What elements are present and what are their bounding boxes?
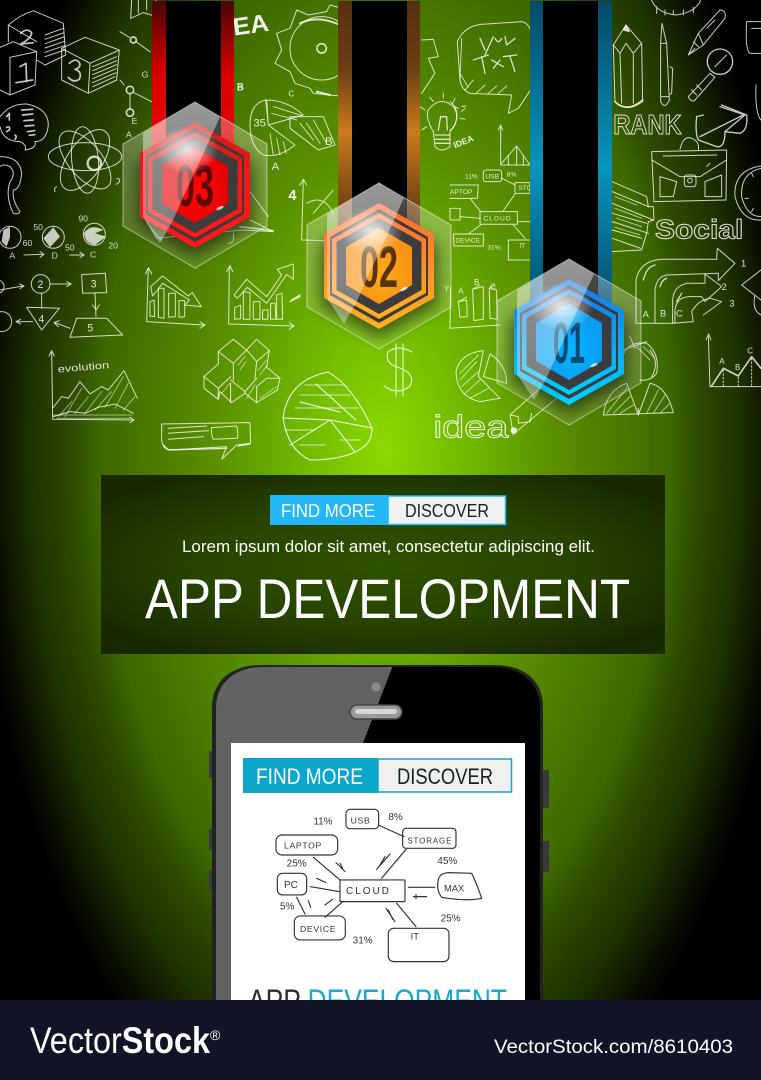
screen button: find more xyxy=(243,758,378,793)
doodle: pie chart 35: B xyxy=(325,136,333,148)
doodle: cloud diagram small: APTOP xyxy=(450,189,473,196)
sketch: labels: 8% xyxy=(388,812,403,823)
camera xyxy=(372,682,380,692)
doodle: evolution area chart xyxy=(49,351,137,423)
doodle: node network: E xyxy=(132,116,138,126)
doodle: pie chart 35: A xyxy=(272,161,280,173)
badge: 02 xyxy=(307,183,451,349)
doodle: small chart near 4: 4 xyxy=(288,188,297,204)
doodle: envelope fan xyxy=(283,372,372,460)
doodle: labels of donut charts: C xyxy=(90,249,96,259)
doodle: IDEA lettering: EA xyxy=(231,10,271,42)
phone reflection xyxy=(210,660,395,1000)
doodle: pie chart 35: C xyxy=(288,90,294,99)
doodle: pie chart 35 xyxy=(237,82,335,173)
doodle: three arrows: A xyxy=(643,309,650,319)
doodle: ABC bar chart: A xyxy=(458,286,464,295)
sketch: boxes xyxy=(276,809,482,962)
glass hexagon xyxy=(307,183,451,349)
badge: 03 xyxy=(123,102,267,268)
number: 02 xyxy=(360,235,398,300)
badge shadow xyxy=(321,216,437,338)
doodle: three arrows: C xyxy=(676,309,683,319)
hexagon rings xyxy=(514,279,624,405)
doodle: top right cards xyxy=(652,0,761,120)
doodle: cloud diagram small: 11% xyxy=(465,173,478,180)
doodle: pie chart 35: 35 xyxy=(253,118,266,130)
doodle: node network: B xyxy=(237,83,243,93)
doodle: labels of donut charts: A xyxy=(9,250,15,260)
sketch: labels: 25% xyxy=(287,859,307,870)
panel: headline banner xyxy=(101,475,665,654)
button: find more: FIND MORE xyxy=(281,500,375,521)
sketch: arrows xyxy=(308,854,427,922)
doodle: hatched pie xyxy=(456,351,507,402)
doodles: left column xyxy=(0,0,300,459)
doodle: node network: G xyxy=(142,69,149,79)
doodle: cloud diagram small: IT xyxy=(519,242,525,249)
doodle: speech bubble with list xyxy=(0,104,48,150)
spot highlight xyxy=(155,126,219,174)
doodle: cloud diagram small: 8% xyxy=(507,172,516,179)
doodle: top corner chart xyxy=(131,0,157,18)
doodle: cloud diagram small: 31% xyxy=(487,244,501,251)
doodle: pencil xyxy=(613,25,643,107)
phone face xyxy=(216,667,540,1000)
doodle: stack of books xyxy=(612,182,654,252)
glint xyxy=(400,286,408,292)
doodle: three arrows: B xyxy=(660,309,666,319)
sketch: labels: LAPTOP xyxy=(284,841,322,851)
sketch: labels: 11% xyxy=(313,817,333,828)
badge shadow xyxy=(137,135,253,257)
hexagon rings xyxy=(140,122,250,248)
doodle: three arrows: 3 xyxy=(729,299,735,309)
doodle: falling bar chart xyxy=(146,268,205,328)
sketch: labels: DEVICE xyxy=(300,924,336,934)
footer logo: VectorStock xyxy=(30,1020,210,1061)
doodles: centre column xyxy=(147,5,500,328)
doodle: node network: A xyxy=(126,129,132,139)
speaker xyxy=(350,705,402,719)
footer url: VectorStock.com/8610403 xyxy=(494,1037,733,1058)
doodle: dollar sign xyxy=(384,344,412,396)
title: APP DEVELOPMENT xyxy=(145,567,630,630)
sketch: labels: 31% xyxy=(353,935,373,946)
doodle: cloud diagram small: CLOUD xyxy=(483,216,512,223)
ribbon: 02 xyxy=(338,1,420,227)
ribbon: 01 xyxy=(530,1,612,303)
doodle: cloud diagram small: STO xyxy=(518,185,532,192)
doodle: cloud diagram small: DEVICE xyxy=(455,237,481,244)
subtitle: Lorem ipsum dolor sit amet, consectetur adipiscing elit. xyxy=(182,537,595,556)
doodle: bubble lamp side arc xyxy=(450,102,466,130)
screen button: find more: FIND MORE xyxy=(256,764,363,789)
doodle: briefcase xyxy=(652,138,727,202)
doodle: flow diagram: 5 xyxy=(87,323,93,335)
doodle: light bulb xyxy=(420,93,476,150)
doodle: ABC line chart xyxy=(706,334,761,387)
glint xyxy=(216,205,224,211)
sketch: links xyxy=(297,825,435,927)
sketch: labels: PC xyxy=(284,880,298,891)
button: find more xyxy=(270,495,388,525)
footer bar xyxy=(0,1000,761,1080)
doodle: flow diagram: 4 xyxy=(38,314,44,326)
doodle: Social lettering: Social xyxy=(655,215,743,245)
doodle: ABC bar chart: C xyxy=(490,282,496,291)
screen title: APP DEVELOPMENT xyxy=(248,983,507,1019)
doodle: pie chart 35: B xyxy=(237,82,244,94)
hand-drawn doodles xyxy=(0,0,761,460)
doodle: diagonal pencil xyxy=(688,10,725,55)
doodle: idea lettering with pencil: idea xyxy=(433,408,509,444)
sketch: labels: 25% xyxy=(441,913,461,924)
doodle: labels of donut charts: D xyxy=(52,250,58,260)
doodle: labels of donut charts: 60 xyxy=(23,238,32,248)
doodle: gear xyxy=(275,5,438,97)
doodle: ABC bar chart: Y xyxy=(444,285,450,294)
phone side buttons xyxy=(209,751,549,891)
sketch: labels: 45% xyxy=(437,856,457,867)
doodle: evolution area chart: evolution xyxy=(57,360,110,376)
doodle: RANK lettering: RANK xyxy=(613,109,682,140)
doodle: isometric cubes xyxy=(204,339,280,403)
gloss highlight xyxy=(327,183,404,324)
doodle: light bulb: IDEA xyxy=(452,133,476,150)
doodle: cloud diagram small xyxy=(450,170,532,260)
badge: 01 xyxy=(497,259,641,425)
doodle: ABC line chart: B xyxy=(735,363,740,372)
doodle: three arrows: 1 xyxy=(741,259,746,269)
doodle: labels of donut charts: 50 xyxy=(65,243,75,253)
sketch: labels: CLOUD xyxy=(346,886,391,897)
doodle: labels of donut charts: 90 xyxy=(78,214,88,224)
hexagon rings xyxy=(324,203,434,329)
spot highlight xyxy=(339,207,403,255)
gloss highlight xyxy=(517,259,594,400)
glass hexagon xyxy=(497,259,641,425)
doodle: empty speech box xyxy=(162,423,251,459)
phone xyxy=(209,660,549,1019)
doodle: node network xyxy=(120,32,243,139)
sketch: labels: 5% xyxy=(280,901,295,912)
doodle: idea lettering with pencil xyxy=(433,388,557,444)
doodle: clock xyxy=(735,166,761,220)
doodle: your text bubble xyxy=(457,22,535,113)
sketch: labels xyxy=(280,812,465,946)
doodle: ABC line chart: A xyxy=(719,357,725,366)
sketch: labels: USB xyxy=(351,815,370,825)
doodle: person xyxy=(603,337,673,415)
doodle: labels of donut charts xyxy=(9,214,118,260)
ribbon: 03 xyxy=(152,1,234,146)
doodle: flow diagram: 3 xyxy=(91,278,97,290)
glint xyxy=(590,362,598,368)
button: discover: DISCOVER xyxy=(405,500,489,521)
sketch: labels: MAX xyxy=(444,883,465,893)
doodle: ABC bar chart: B xyxy=(474,278,479,287)
doodle: glasses xyxy=(696,105,747,147)
doodle: atom xyxy=(48,121,122,199)
button: discover xyxy=(388,496,506,524)
footer registered mark: ® xyxy=(210,1027,221,1043)
phone body xyxy=(212,665,543,1000)
doodle: small peak chart xyxy=(498,125,530,165)
doodles: right column xyxy=(433,0,761,444)
screen button: discover: DISCOVER xyxy=(397,764,493,789)
gloss highlight xyxy=(143,102,220,243)
doodle: pen xyxy=(661,23,673,105)
doodle: three arrows: 2 xyxy=(722,282,727,292)
doodle: labels of donut charts: 50 xyxy=(33,222,43,232)
badge shadow xyxy=(511,292,627,414)
doodle: number cubes xyxy=(0,11,119,95)
number: 03 xyxy=(176,154,214,219)
doodle: donut charts row xyxy=(0,223,106,258)
doodle: flow diagram: 2 xyxy=(37,279,43,291)
doodle: ABC bar chart xyxy=(444,278,500,328)
spot highlight xyxy=(529,283,593,331)
doodle: three arrows xyxy=(636,248,761,323)
doodle: question mark xyxy=(0,157,22,214)
doodle: ABC line chart: C xyxy=(747,346,753,355)
doodle: open book under badge xyxy=(147,192,273,243)
doodle: small chart near 4 xyxy=(288,179,360,242)
doodle: flow diagram xyxy=(0,273,123,337)
badge: 01: 01 xyxy=(553,311,585,376)
doodle: magnifier xyxy=(688,49,733,101)
doodle: growth bar chart xyxy=(227,264,300,329)
glass hexagon xyxy=(123,102,267,268)
cloud network sketch xyxy=(276,809,482,962)
screen button: discover xyxy=(378,759,512,792)
sketch: labels: IT xyxy=(411,931,419,941)
doodle: labels of donut charts: 20 xyxy=(108,240,118,250)
doodle: cloud diagram small: USB xyxy=(485,173,500,180)
phone screen xyxy=(231,743,525,1005)
sketch: labels: STORAGE xyxy=(407,835,452,845)
